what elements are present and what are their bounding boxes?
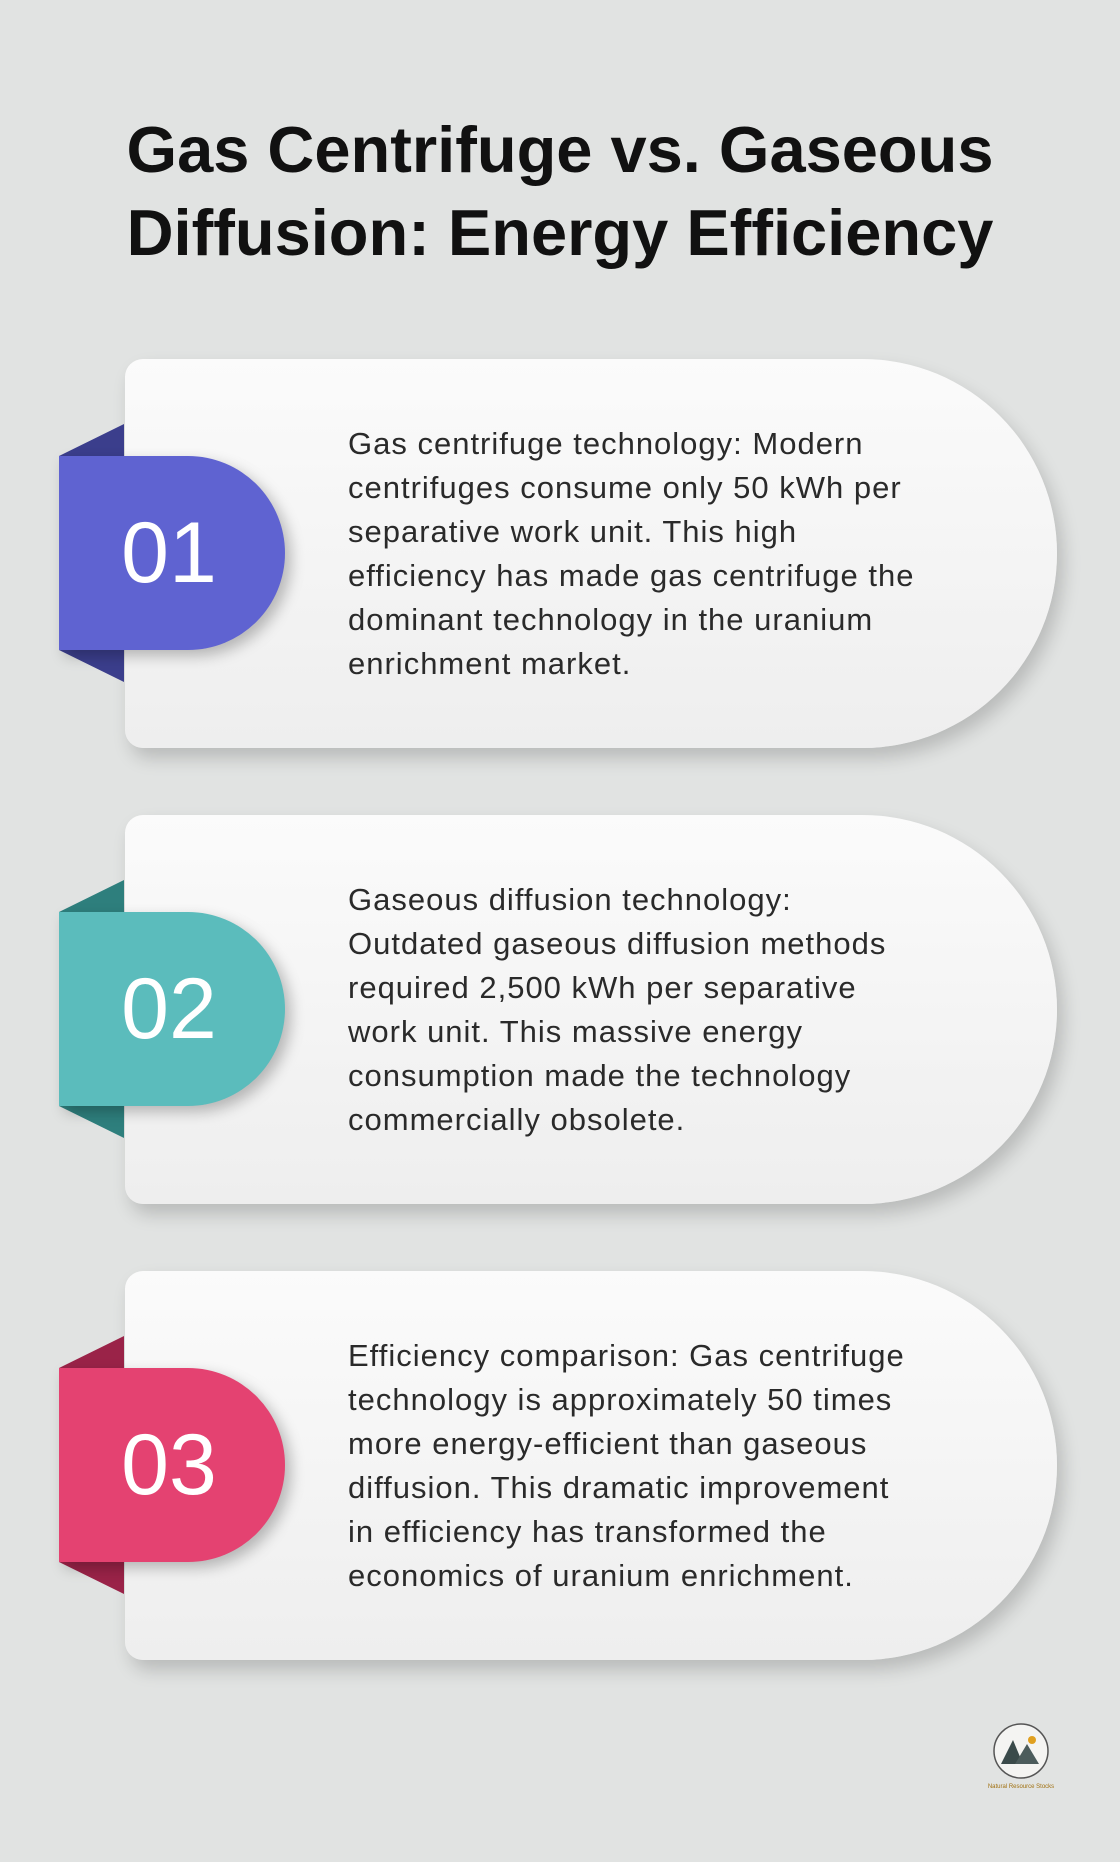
logo: Natural Resource Stocks (988, 1784, 1054, 1790)
text block 2 (348, 882, 886, 1137)
text block 1: efficiency has made gas centrifuge the (348, 558, 914, 593)
text block 3: economics of uranium enrichment. (348, 1558, 854, 1593)
text block 2: Gaseous diffusion technology: (348, 882, 792, 917)
text block 1: enrichment market. (348, 646, 631, 681)
number tab 02: 02 (121, 961, 217, 1057)
fold: card 3 (59, 1336, 124, 1594)
panel: card 1 (125, 359, 1057, 748)
text block 2: Outdated gaseous diffusion methods (348, 926, 886, 961)
text block 3: in efficiency has transformed the (348, 1514, 827, 1549)
fold: card 2 (59, 880, 124, 1138)
title: Diffusion: Energy Efficiency (127, 196, 993, 269)
text block 1: dominant technology in the uranium (348, 602, 873, 637)
text block 3 (348, 1338, 905, 1593)
text block 1: Gas centrifuge technology: Modern (348, 426, 864, 461)
text block 1: centrifuges consume only 50 kWh per (348, 470, 902, 505)
title (127, 113, 993, 269)
fold: card 1 (59, 424, 124, 682)
panel: card 3 (125, 1271, 1057, 1660)
text block 1: separative work unit. This high (348, 514, 797, 549)
number tab 01: 01 (121, 505, 217, 601)
text block 2: required 2,500 kWh per separative (348, 970, 857, 1005)
text block 3: technology is approximately 50 times (348, 1382, 892, 1417)
logo (988, 1723, 1054, 1790)
title: Gas Centrifuge vs. Gaseous (127, 113, 993, 186)
text block 3: diffusion. This dramatic improvement (348, 1470, 889, 1505)
text block 2: work unit. This massive energy (348, 1014, 803, 1049)
text block 2: consumption made the technology (348, 1058, 851, 1093)
panel: card 2 (125, 815, 1057, 1204)
text block 3: Efficiency comparison: Gas centrifuge (348, 1338, 905, 1373)
text block 2: commercially obsolete. (348, 1102, 685, 1137)
text block 1 (348, 426, 914, 681)
number tab 03: 03 (121, 1417, 217, 1513)
text block 3: more energy-efficient than gaseous (348, 1426, 867, 1461)
